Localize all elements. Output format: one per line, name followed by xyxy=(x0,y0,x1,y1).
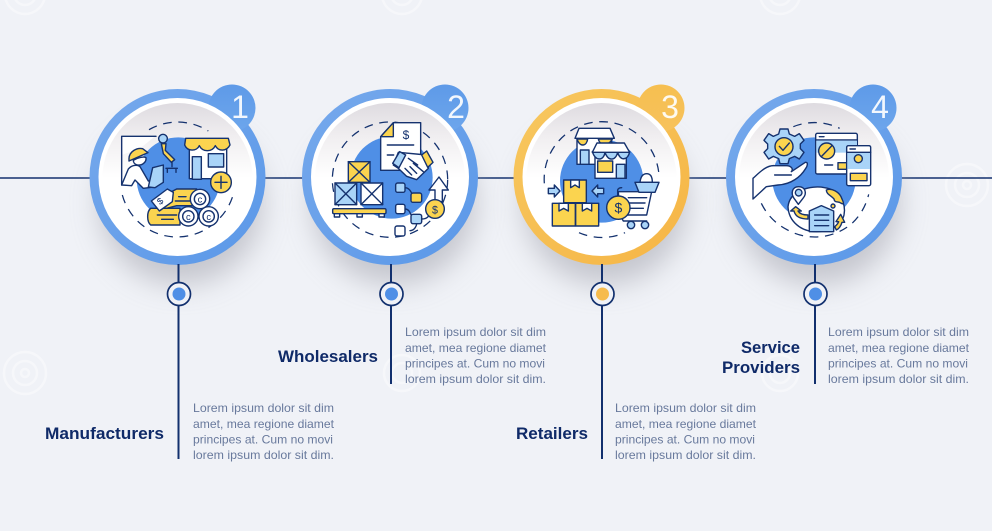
icon: wholesale: $ xyxy=(432,204,438,216)
text block 3: lorem ipsum dolor sit dim. xyxy=(615,448,756,462)
text block 4: principes at. Cum no movi xyxy=(828,356,968,370)
watermark marks xyxy=(4,0,988,394)
text block 2: amet, mea regione diamet xyxy=(405,341,547,355)
panel: step 1 Manufacturers xyxy=(45,84,335,462)
heading: Manufacturers: Manufacturers xyxy=(45,424,164,443)
text block 2: lorem ipsum dolor sit dim. xyxy=(405,372,546,386)
panel: step 4 Service Providers xyxy=(722,84,970,386)
icon: wholesale xyxy=(332,122,448,237)
step 1 number: 1 xyxy=(231,89,249,125)
step 1 circle xyxy=(90,84,266,285)
step 2 number: 2 xyxy=(447,89,465,125)
stem with marker 4 xyxy=(804,264,827,384)
heading: Service Providers: Service xyxy=(741,338,800,357)
text block 2: principes at. Cum no movi xyxy=(405,356,545,370)
step 2 circle xyxy=(302,84,478,285)
panel: step 3 Retailers xyxy=(514,84,757,462)
panel: step 2 Wholesalers xyxy=(278,84,547,386)
text block 4: Lorem ipsum dolor sit dim xyxy=(828,325,969,339)
text block 1: Lorem ipsum dolor sit dim xyxy=(193,401,334,415)
icon: retail xyxy=(544,122,659,237)
step 3 number: 3 xyxy=(661,89,679,125)
icon: manufacturing xyxy=(122,122,234,237)
horizontal timeline xyxy=(0,177,992,179)
icon: manufacturing: c xyxy=(198,195,203,205)
text block 4: lorem ipsum dolor sit dim. xyxy=(828,372,969,386)
text block 1: principes at. Cum no movi xyxy=(193,432,333,446)
stem with marker 3 xyxy=(591,264,614,459)
icon: manufacturing: c xyxy=(206,212,211,222)
step 3 circle xyxy=(514,84,690,285)
heading: Wholesalers: Wholesalers xyxy=(278,347,378,366)
icon: wholesale: $ xyxy=(403,128,410,142)
icon: manufacturing: c xyxy=(186,212,191,222)
icon: services xyxy=(753,123,871,237)
text block 3: Lorem ipsum dolor sit dim xyxy=(615,401,756,415)
text block 1: amet, mea regione diamet xyxy=(193,417,335,431)
stem with marker 2 xyxy=(380,264,403,384)
icon: retail: $ xyxy=(614,200,622,216)
text block 4: amet, mea regione diamet xyxy=(828,341,970,355)
stem with marker 1 xyxy=(168,264,190,459)
step 4 circle xyxy=(726,84,902,285)
text block 3: amet, mea regione diamet xyxy=(615,417,757,431)
text block 1: lorem ipsum dolor sit dim. xyxy=(193,448,334,462)
heading: Retailers: Retailers xyxy=(516,424,588,443)
step 4 number: 4 xyxy=(871,89,889,125)
text block 2: Lorem ipsum dolor sit dim xyxy=(405,325,546,339)
icon: manufacturing: $ xyxy=(155,195,166,207)
heading: Service Providers: Providers xyxy=(722,358,800,377)
text block 3: principes at. Cum no movi xyxy=(615,432,755,446)
